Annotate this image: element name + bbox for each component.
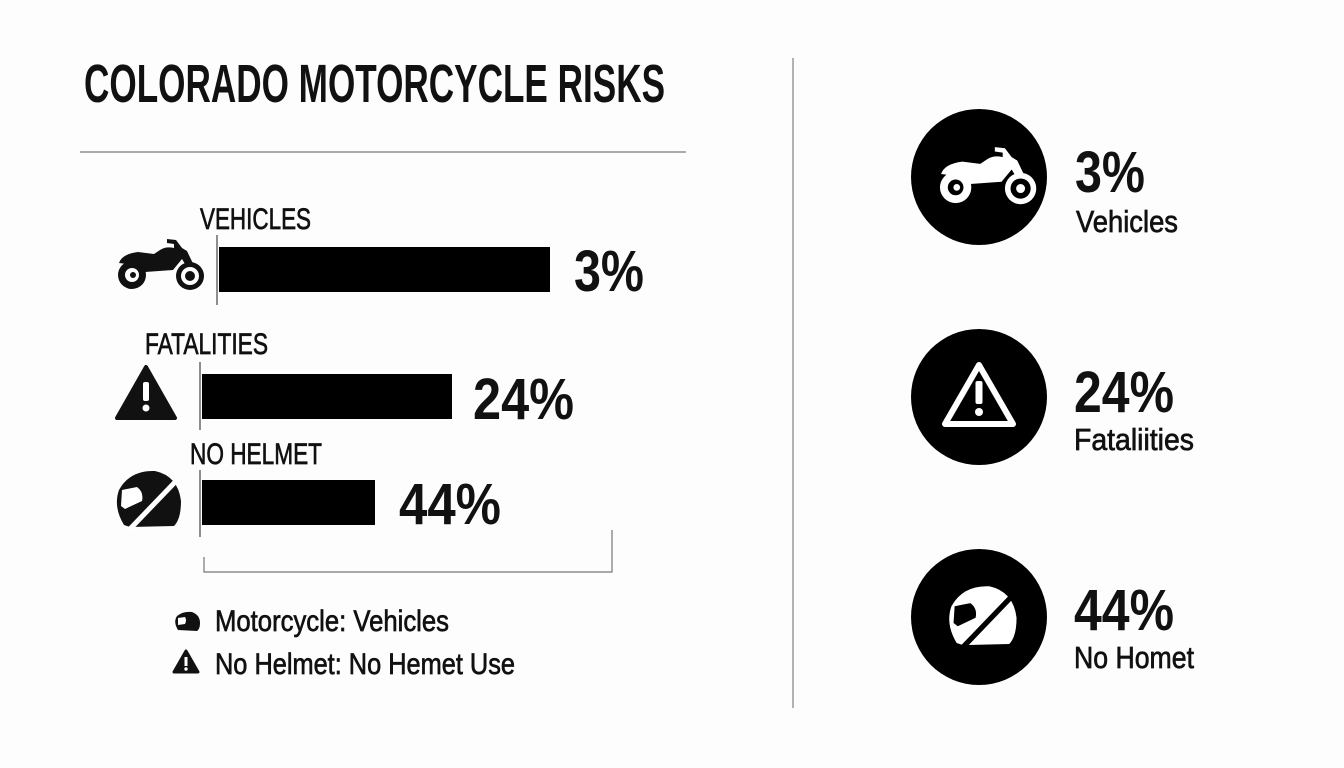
stat: fatalities: Fataliities bbox=[1074, 422, 1194, 457]
legend bbox=[174, 605, 515, 681]
row: fatalities: 24% bbox=[473, 367, 574, 432]
stat: vehicles: 3% bbox=[1075, 140, 1145, 205]
icon: helmet bbox=[117, 471, 181, 530]
title: COLORADO MOTORCYCLE RISKS bbox=[84, 54, 665, 114]
stat: fatalities bbox=[911, 329, 1194, 465]
legend item: motorcycle: Motorcycle: Vehicles bbox=[215, 605, 449, 638]
icon: warning white bbox=[945, 365, 1013, 424]
icon: motorcycle white bbox=[940, 147, 1036, 204]
stat: no helmet bbox=[911, 549, 1194, 685]
stat: vehicles: Vehicles bbox=[1076, 204, 1178, 239]
row: vehicles bbox=[118, 203, 644, 305]
row: fatalities: FATALITIES bbox=[145, 328, 268, 361]
icon: motorcycle bbox=[118, 239, 204, 290]
stat: fatalities: 24% bbox=[1074, 360, 1174, 425]
stat: no helmet: No Homet bbox=[1074, 640, 1194, 675]
row: no helmet bbox=[117, 438, 501, 537]
stat: no helmet: 44% bbox=[1074, 578, 1174, 643]
row: no helmet: NO HELMET bbox=[190, 438, 322, 471]
bar chart bbox=[117, 203, 644, 572]
row: fatalities bbox=[117, 328, 574, 432]
icon: warning bbox=[117, 367, 175, 418]
row: vehicles: 3% bbox=[574, 239, 644, 304]
stat: vehicles bbox=[911, 109, 1178, 245]
row: vehicles: VEHICLES bbox=[200, 203, 311, 236]
row: no helmet: 44% bbox=[399, 472, 501, 537]
legend item: no helmet: No Helmet: No Hemet Use bbox=[215, 648, 515, 681]
icon: helmet white bbox=[949, 586, 1017, 648]
